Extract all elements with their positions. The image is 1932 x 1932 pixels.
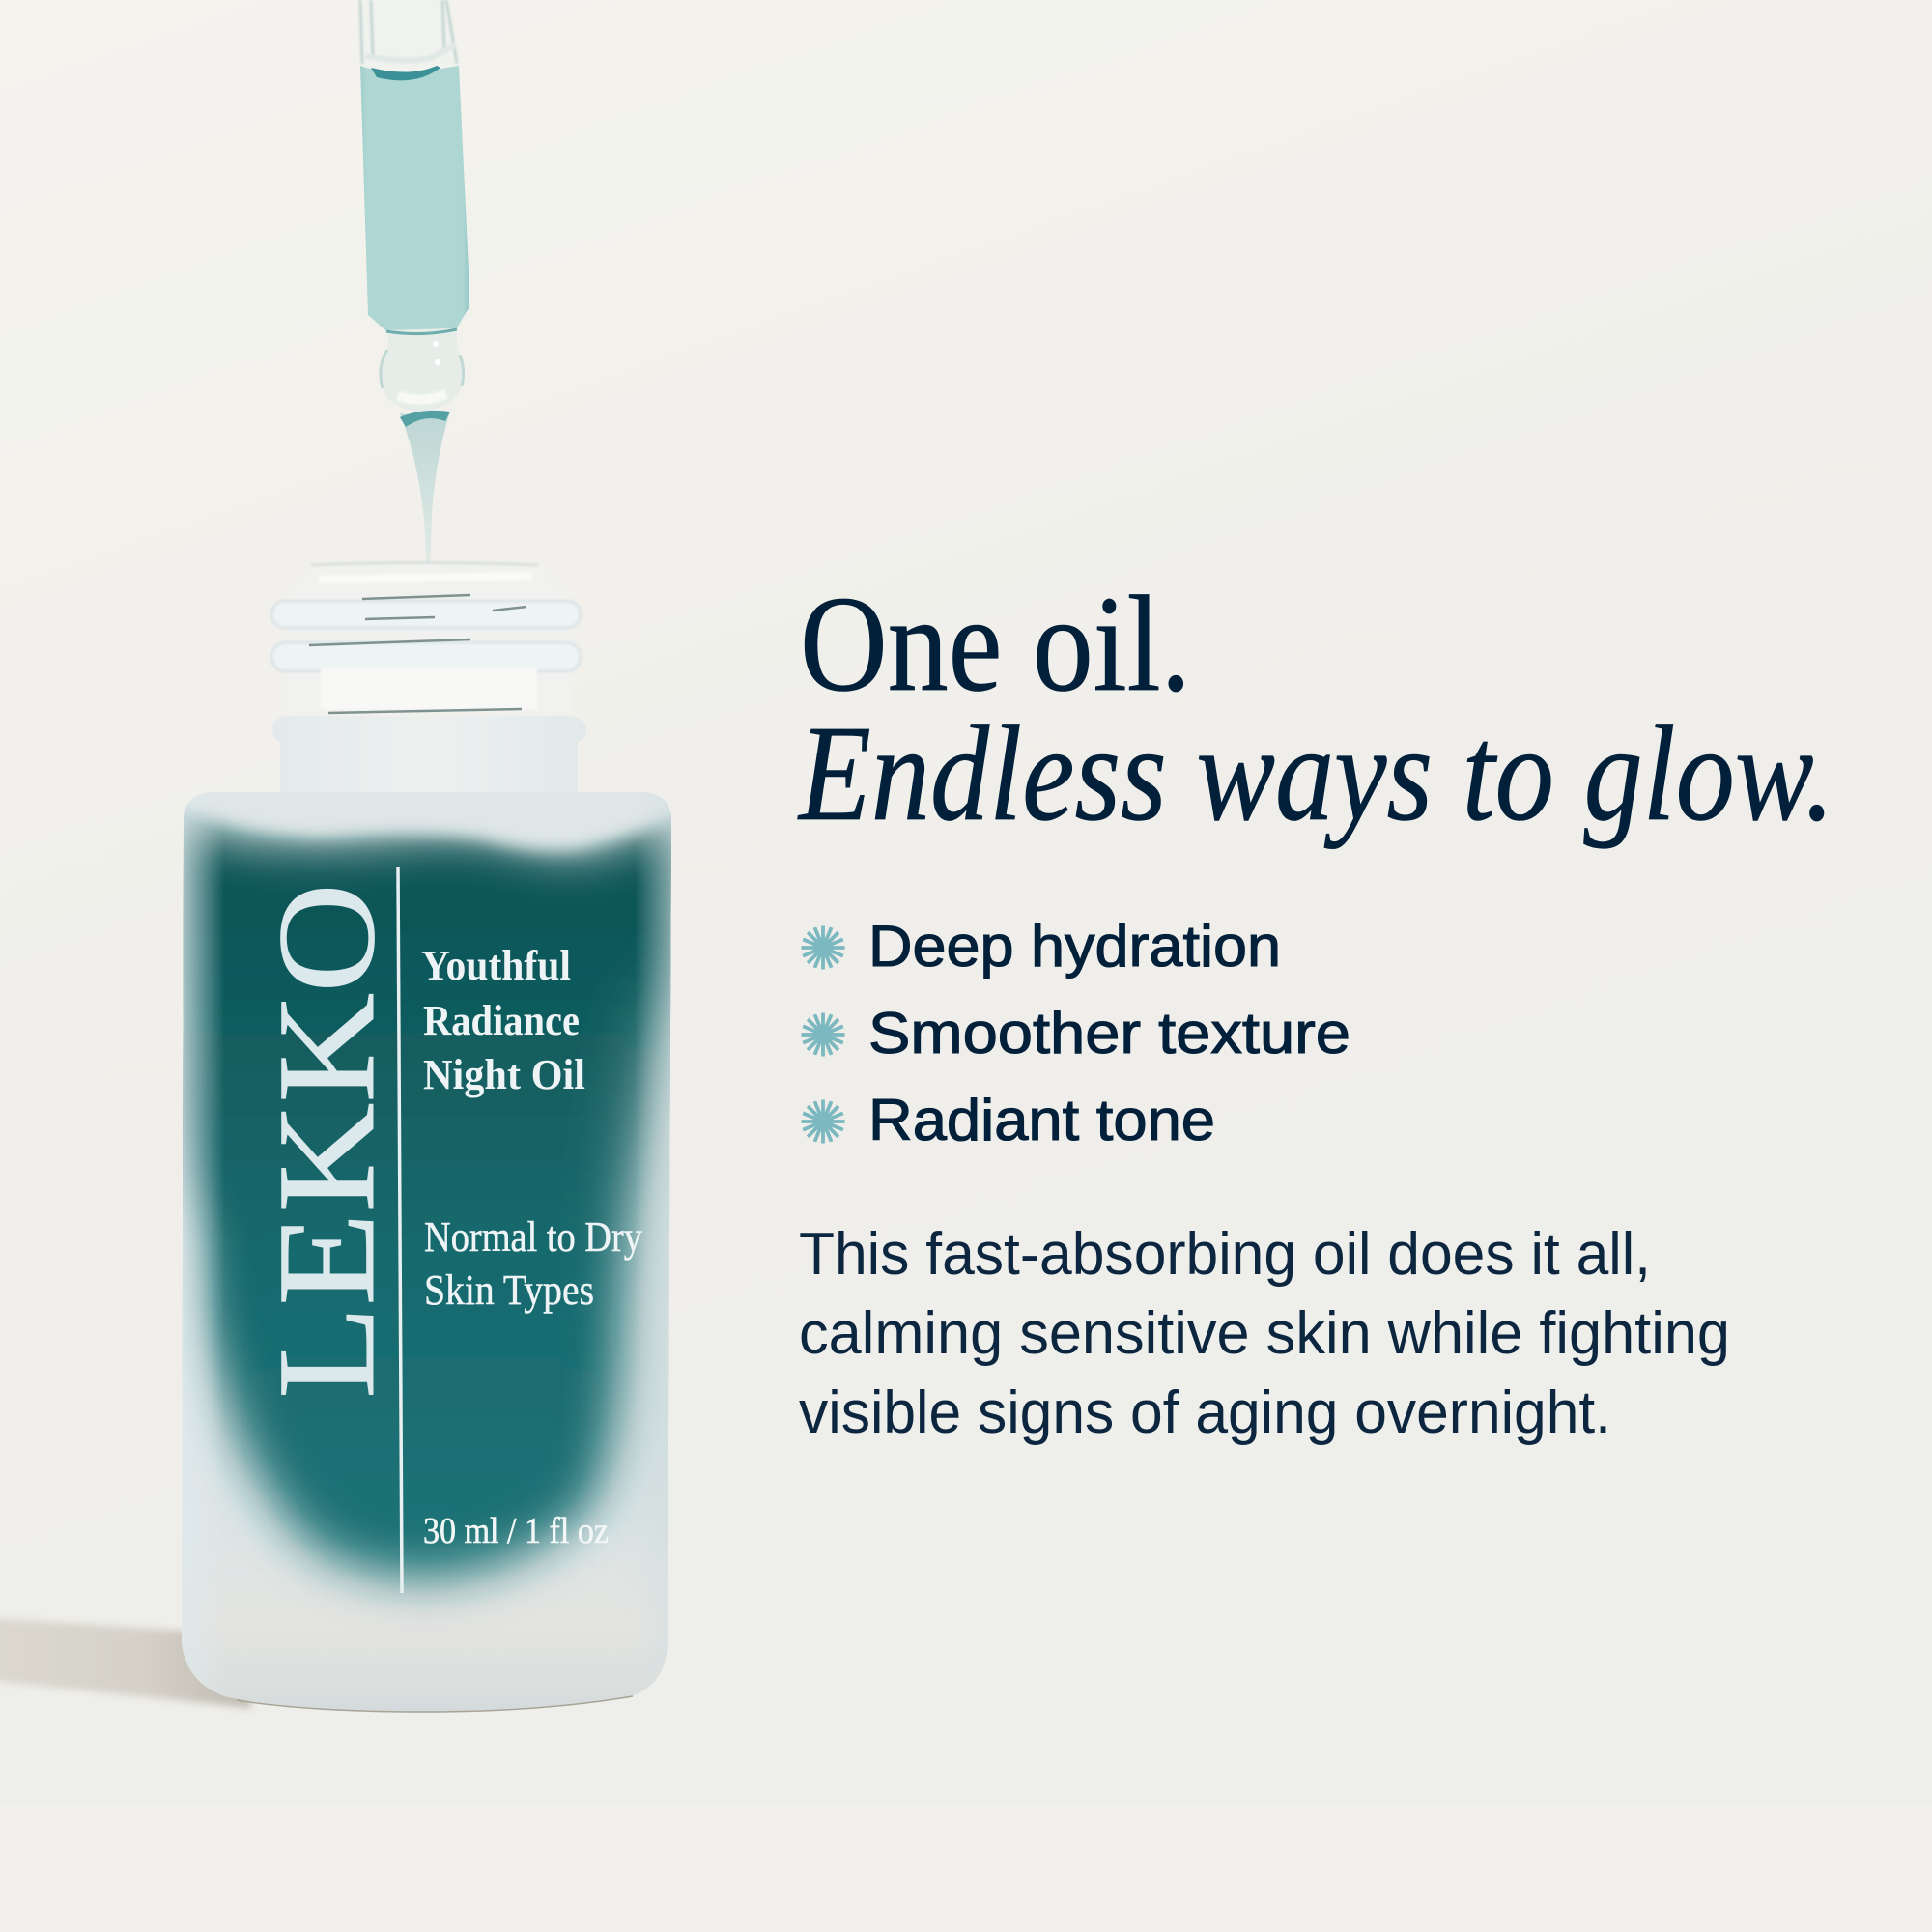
cast shadow — [0, 1617, 251, 1708]
label divider line — [398, 867, 402, 1593]
benefit: smoother texture: Smoother texture — [868, 1001, 1350, 1065]
description paragraph: This fast-absorbing oil does it all, — [799, 1221, 1651, 1288]
brand name: LEKKO — [250, 883, 404, 1399]
dropper liquid — [360, 66, 469, 330]
icon: starburst — [802, 1012, 844, 1057]
bottle — [182, 560, 671, 1713]
skin types: Normal to Dry — [424, 1213, 642, 1261]
frosted collar — [272, 716, 586, 802]
product name: Radiance — [423, 997, 580, 1044]
headline: One oil. — [800, 567, 1191, 720]
benefits list — [802, 914, 1350, 1152]
description paragraph: visible signs of aging overnight. — [799, 1379, 1611, 1446]
headline — [797, 567, 1834, 849]
teal oil inside — [182, 792, 671, 1677]
dropper glass tube — [359, 0, 460, 68]
icon: starburst — [802, 925, 844, 970]
product name — [421, 942, 585, 1098]
description paragraph — [799, 1221, 1730, 1446]
dropper bulb — [381, 328, 464, 412]
product name: Youthful — [421, 942, 571, 989]
benefit: deep hydration: Deep hydration — [868, 914, 1281, 979]
benefit: radiant tone: Radiant tone — [868, 1088, 1215, 1152]
skin types — [424, 1213, 642, 1314]
glass thread neck — [271, 562, 581, 713]
volume: 30 ml / 1 fl oz — [423, 1511, 609, 1551]
dropper — [359, 0, 469, 591]
frosted body — [182, 792, 671, 1712]
description paragraph: calming sensitive skin while fighting — [799, 1300, 1730, 1367]
product name: Night Oil — [423, 1051, 585, 1098]
icon: starburst — [802, 1099, 844, 1144]
oil stream — [400, 411, 450, 591]
meniscus — [371, 66, 440, 80]
skin types: Skin Types — [424, 1266, 594, 1314]
bottle base contact line — [237, 1696, 633, 1712]
